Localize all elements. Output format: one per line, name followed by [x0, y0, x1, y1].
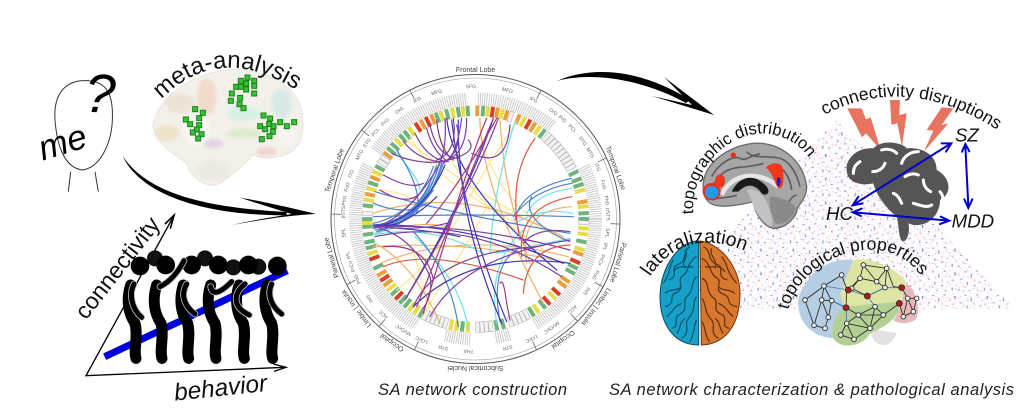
gyrus labels: IFG — [413, 96, 423, 105]
panel: connectivity-behavior plot — [69, 211, 287, 407]
panel: connectivity disruptions — [822, 84, 1000, 242]
gyrus labels: MTG — [584, 147, 595, 159]
gyrus labels: SPL — [341, 228, 348, 238]
panel: lateralization — [639, 230, 747, 346]
panel: self and behavior — [34, 54, 356, 407]
lobe labels: Parietal Lobe — [608, 242, 627, 283]
gyrus labels: PrG — [380, 117, 391, 128]
sagittal brain slice — [703, 143, 807, 228]
heading: lateralization: lateralization — [639, 230, 747, 276]
panel: meta-analysis brain — [152, 54, 304, 186]
gyrus labels: PrCu — [596, 253, 606, 266]
arrow: swoosh to characterization — [557, 72, 714, 115]
gyrus labels: PCL — [567, 123, 578, 135]
gyrus labels: LOcC — [414, 334, 429, 345]
caption: SA network characterization and pathological analysis: SA network characterization & pathological analysis — [609, 381, 1014, 399]
gyrus labels: FuG — [599, 179, 607, 190]
gyrus labels — [340, 84, 611, 354]
brain atlas — [153, 69, 303, 185]
heatmap ring — [362, 105, 589, 333]
hub nodes — [843, 285, 905, 311]
gyrus labels: MFG — [501, 87, 514, 95]
group labels: HC — [826, 203, 853, 224]
gyrus labels: ACC — [566, 303, 578, 315]
lobe labels: Subcortical Nuclei — [447, 364, 504, 371]
icon: head outline — [55, 81, 112, 192]
activation blobs — [703, 152, 783, 200]
gyrus labels: PCL — [370, 127, 381, 138]
heading: meta-analysis: meta-analysis — [154, 54, 300, 98]
gyrus labels: STR — [501, 343, 513, 351]
dark brain — [847, 143, 948, 242]
chords — [373, 118, 573, 328]
outer rings — [331, 74, 620, 364]
gyrus labels: IPL — [601, 242, 608, 251]
lobe labels: Frontal Lobe — [456, 67, 495, 74]
panel: topographic distribution — [682, 122, 814, 229]
gyrus labels: OrG — [394, 106, 405, 116]
gyrus labels: OrG — [548, 107, 559, 117]
two-hemisphere brain — [660, 241, 740, 345]
lobe labels: Temporal Lobe — [324, 148, 346, 194]
gyrus labels: PrCu — [347, 260, 357, 273]
regression line — [105, 271, 287, 357]
lobed brain — [798, 259, 918, 345]
lobe labels: Parietal Lobe — [323, 237, 341, 278]
gyrus labels: ACC — [378, 308, 390, 320]
gyrus labels: LOcC — [524, 333, 538, 344]
gyrus labels: STR — [438, 343, 449, 351]
group labels: MDD — [952, 210, 994, 231]
lobe labels: Limbic | Insula — [341, 288, 373, 328]
matrix background — [699, 120, 1012, 310]
lobe labels — [323, 67, 627, 371]
heading: topological properties: topological properties — [778, 240, 926, 308]
panel: network characterization and pathological analysis — [639, 84, 1012, 346]
gyrus labels: IFG — [528, 96, 539, 105]
gyrus labels: ITG — [347, 169, 356, 179]
gyrus labels: INS — [581, 286, 591, 297]
gyrus labels: SFG — [466, 84, 476, 90]
gyrus labels: MVOcC — [394, 322, 413, 337]
gyrus labels: MTG — [355, 149, 365, 161]
gyrus labels: MFG — [431, 88, 443, 97]
gyrus labels: PhG — [341, 195, 348, 206]
heading: connectivity disruptions: connectivity disruptions — [822, 84, 1000, 128]
caption: SA network construction: SA network construction — [378, 381, 567, 399]
label: me: me — [34, 117, 91, 168]
group arrows — [853, 143, 972, 224]
gyrus labels: FuG — [343, 182, 352, 193]
gyrus labels: SPL — [603, 228, 610, 238]
arrow: swoosh to network — [123, 156, 316, 225]
gyrus labels: PoG — [353, 273, 363, 285]
gyrus labels: PoG — [590, 269, 600, 281]
chart: SA network circular connectogram — [306, 50, 645, 399]
gyrus labels: IPL — [345, 251, 353, 260]
gyrus labels: MVOcC — [542, 320, 560, 335]
label: question mark: ? — [82, 61, 118, 125]
gyrus labels: pSTS — [340, 205, 347, 218]
group labels — [826, 125, 994, 231]
gyrus labels: STG — [362, 137, 373, 149]
gyrus labels: pSTS — [604, 208, 611, 221]
activation foci — [183, 75, 297, 142]
axes — [86, 215, 286, 376]
network nodes — [803, 263, 919, 342]
gyrus labels: STG — [577, 135, 588, 147]
row of human figures — [128, 250, 287, 358]
lobe labels: Occipital — [379, 331, 406, 353]
axis label: behavior: behavior — [173, 370, 269, 407]
region label band — [306, 50, 645, 388]
gyrus labels: PrG — [557, 114, 568, 125]
lobe labels: Temporal Lobe — [604, 145, 626, 191]
gyrus labels: ITG — [593, 162, 601, 173]
network edges — [805, 265, 917, 339]
gyrus labels: PhG — [603, 195, 610, 206]
gyrus labels: THA — [463, 348, 474, 354]
group labels: SZ — [955, 125, 979, 146]
axis label: connectivity: connectivity — [69, 211, 165, 324]
lobe labels: Limbic | Insula — [580, 286, 612, 326]
gyrus labels: INS — [365, 293, 375, 304]
lightning bolts — [847, 100, 953, 152]
heading: topographic distribution: topographic distribution — [682, 122, 814, 214]
lobe labels: Occipital — [550, 328, 576, 350]
panel: topological properties — [778, 240, 926, 346]
